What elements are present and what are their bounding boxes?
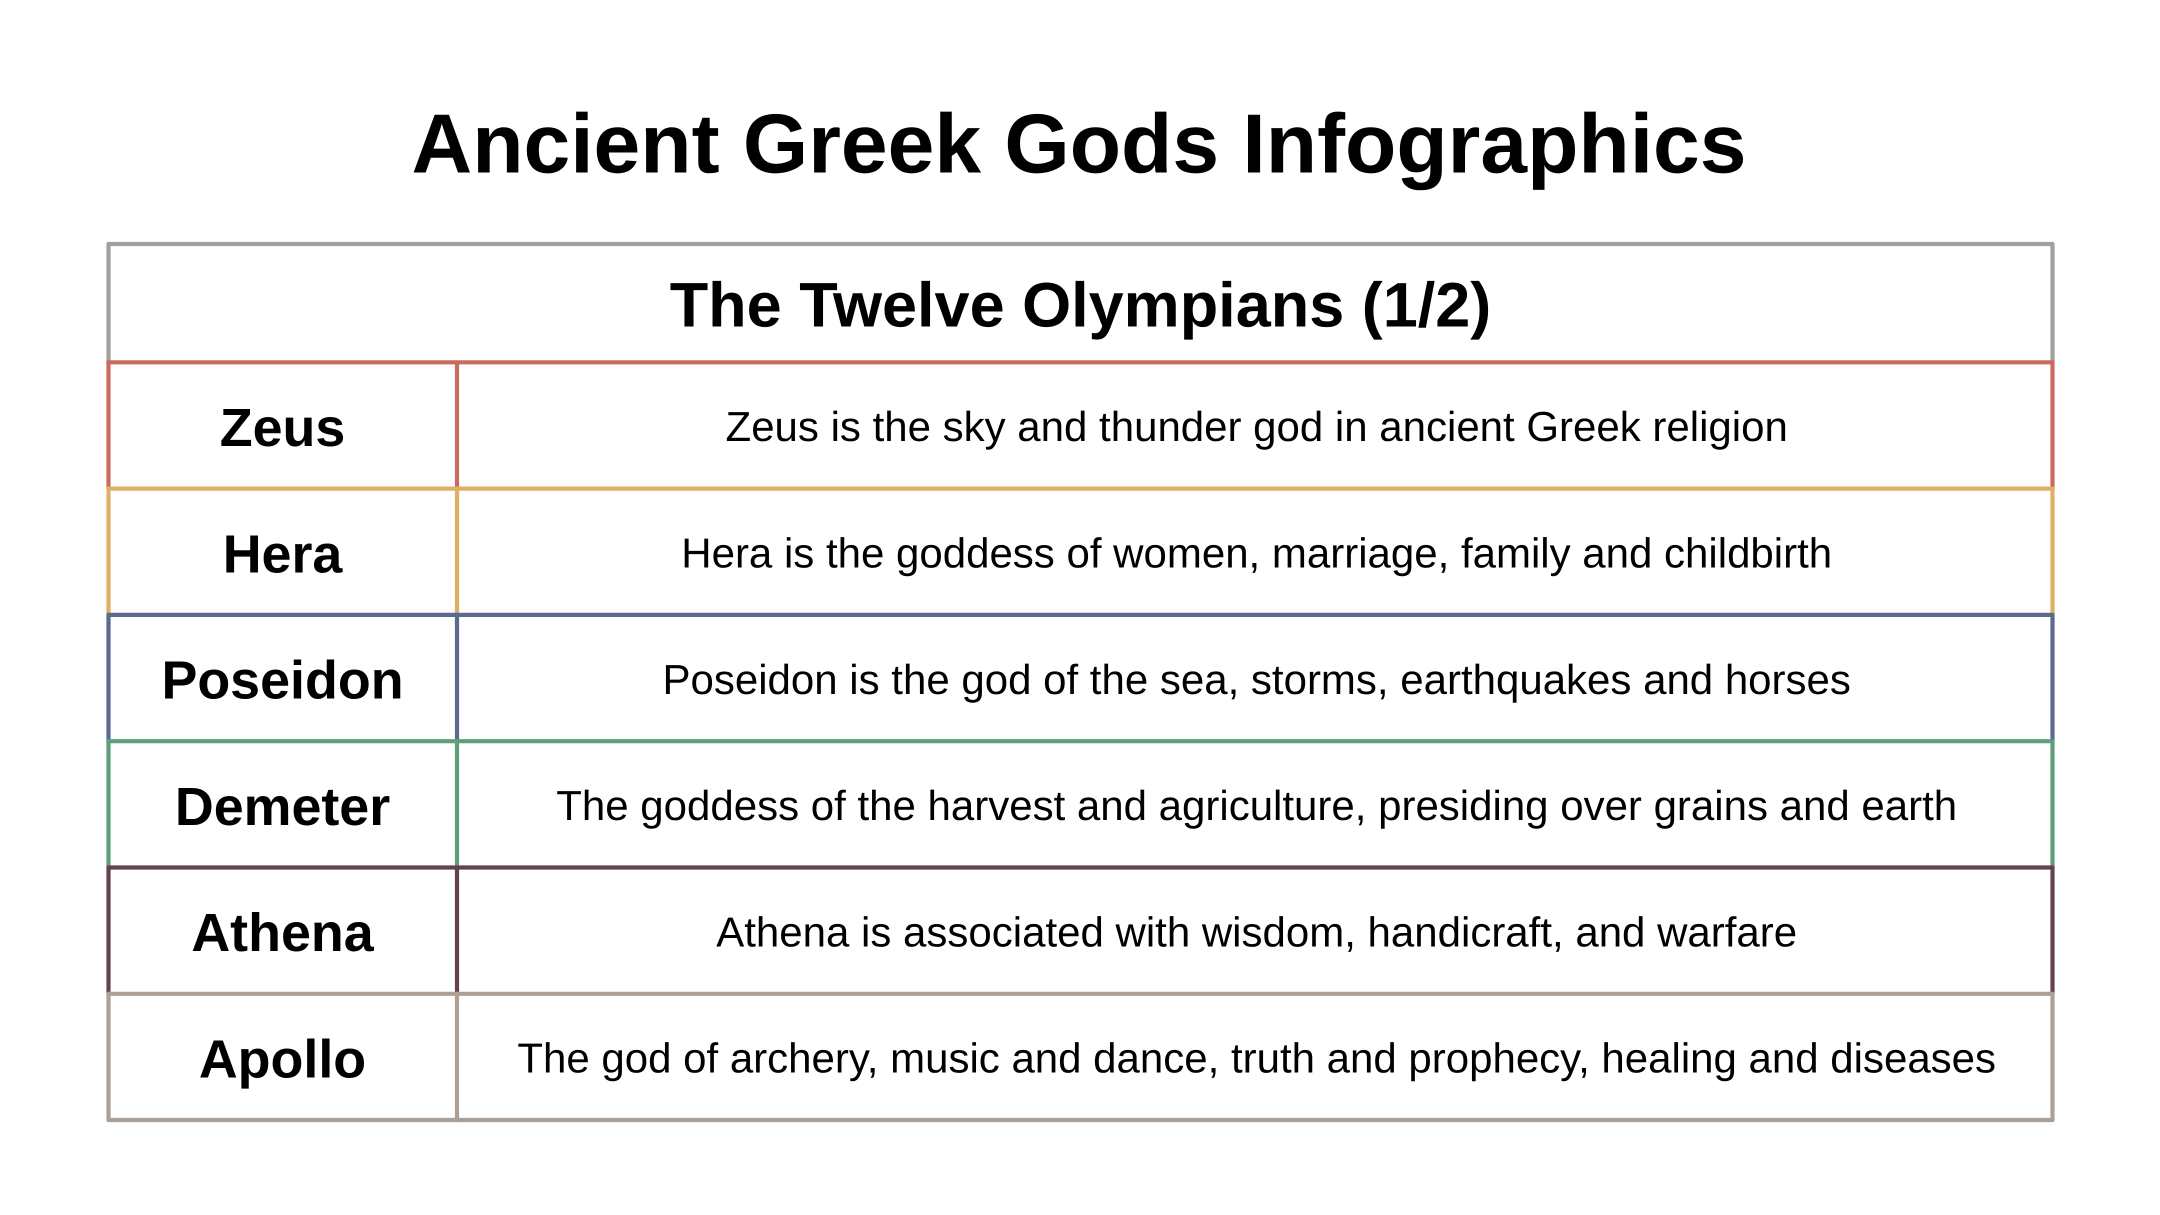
row: Apollo: Apollo: [199, 1030, 366, 1090]
row: Zeus: Zeus: [220, 398, 345, 458]
panel: table of the twelve Olympians: [108, 244, 2052, 1120]
row: Zeus: Zeus is the sky and thunder god in ancient Greek religion: [726, 403, 1788, 450]
row: Poseidon: Poseidon is the god of the sea, storms, earthquakes and horses: [663, 656, 1851, 703]
row: Demeter: The goddess of the harvest and agriculture, presiding over grains and earth: [556, 782, 1957, 829]
row: Zeus: [108, 362, 2052, 489]
row: Athena: Athena is associated with wisdom, handicraft, and warfare: [716, 908, 1797, 955]
row: Hera: Hera is the goddess of women, marriage, family and childbirth: [681, 530, 1832, 576]
row: Athena: [108, 868, 2052, 994]
row: Hera: [108, 489, 2052, 615]
row: Apollo: [108, 994, 2052, 1120]
row: Apollo: The god of archery, music and dance, truth and prophecy, healing and diseases: [517, 1035, 1996, 1082]
row: Hera: Hera: [223, 524, 343, 584]
row: Demeter: Demeter: [175, 777, 390, 837]
row: Athena: Athena: [191, 903, 375, 963]
row: Poseidon: Poseidon: [161, 651, 404, 711]
row: Demeter: [108, 741, 2052, 868]
table header row: The Twelve Olympians (1/2): [670, 270, 1491, 340]
title: Ancient Greek Gods Infographics: [412, 97, 1746, 191]
row: Poseidon: [108, 615, 2052, 741]
